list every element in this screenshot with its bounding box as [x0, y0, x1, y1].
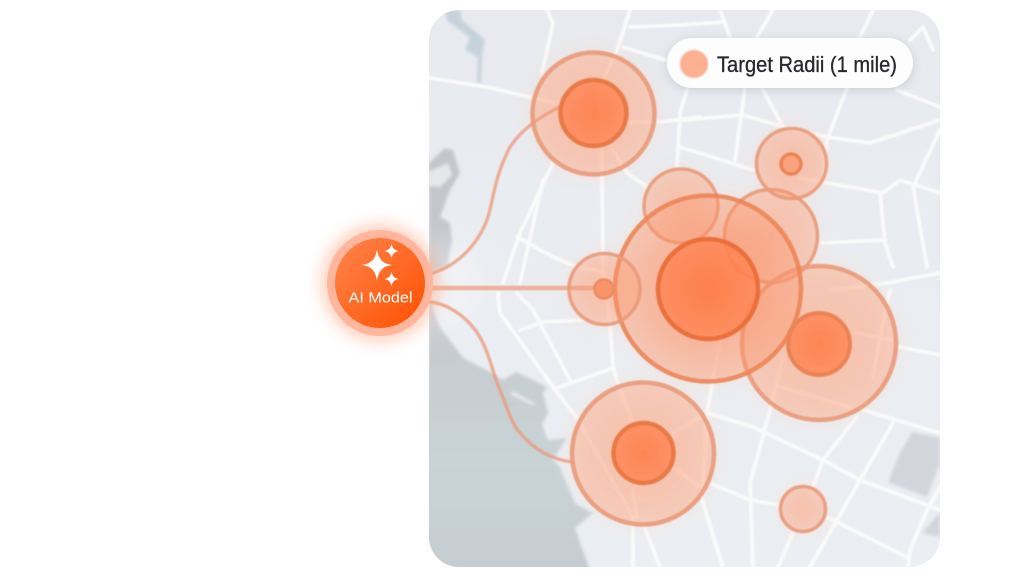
- target circle: small middle: [569, 254, 640, 324]
- target circle: upper right overlap: [724, 190, 818, 282]
- badge label: AI Model: [348, 290, 412, 306]
- target circle: top: [532, 52, 654, 174]
- icon: sparkles: [362, 244, 398, 286]
- curve to bottom target: [430, 302, 572, 462]
- target circle: upper middle overlap: [644, 169, 718, 243]
- legend: target radii: [667, 38, 913, 88]
- soft glow behind circles: [529, 49, 899, 534]
- water: coastline and bay: [425, 10, 940, 570]
- target circle: large centre: [615, 196, 801, 382]
- map panel: [395, 10, 940, 570]
- target circle: small bottom right: [780, 486, 826, 532]
- connector curves from AI model to targets: [430, 107, 592, 462]
- straight connector to middle target: [432, 286, 592, 290]
- target circle: bottom: [572, 382, 714, 524]
- legend swatch: [680, 50, 708, 78]
- light haze around the badge: [430, 241, 450, 328]
- legend label: Target Radii (1 mile): [717, 52, 897, 77]
- road network: [429, 10, 940, 567]
- AI model badge: [322, 225, 438, 341]
- target circle: right: [742, 266, 896, 420]
- target circle: small top right: [756, 128, 826, 198]
- curve to top target: [433, 107, 560, 273]
